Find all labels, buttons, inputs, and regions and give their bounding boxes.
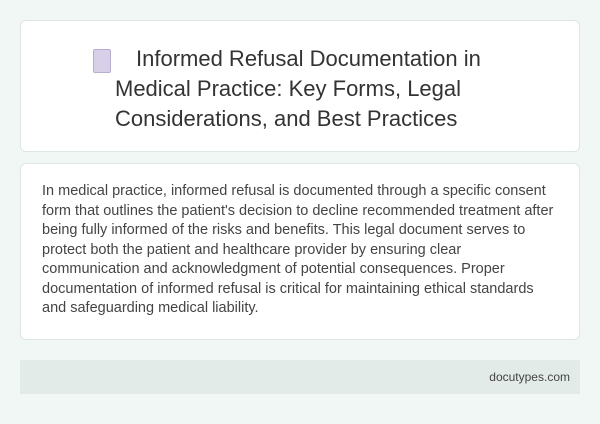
text block: documentation of informed refusal is critical for maintaining ethical standards xyxy=(42,280,534,296)
footer text: docutypes.com xyxy=(489,370,570,384)
footer xyxy=(20,360,580,394)
panel: title card xyxy=(20,20,580,152)
text block xyxy=(42,183,554,316)
text block: being fully informed of the risks and benefits. This legal document serves to xyxy=(42,222,525,238)
text block: communication and acknowledgment of potential consequences. Proper xyxy=(42,261,505,277)
text block: protect both the patient and healthcare provider by ensuring clear xyxy=(42,242,461,258)
title: Informed Refusal Documentation in Medical Practice: Key Forms, Legal Considerations, and Best Practices xyxy=(115,46,481,131)
panel: description xyxy=(20,163,580,340)
text block: and safeguarding medical liability. xyxy=(42,300,259,316)
icon: document scroll xyxy=(93,49,111,73)
text block: In medical practice, informed refusal is documented through a specific consent xyxy=(42,183,546,199)
text block: form that outlines the patient's decision to decline recommended treatment after xyxy=(42,202,553,218)
